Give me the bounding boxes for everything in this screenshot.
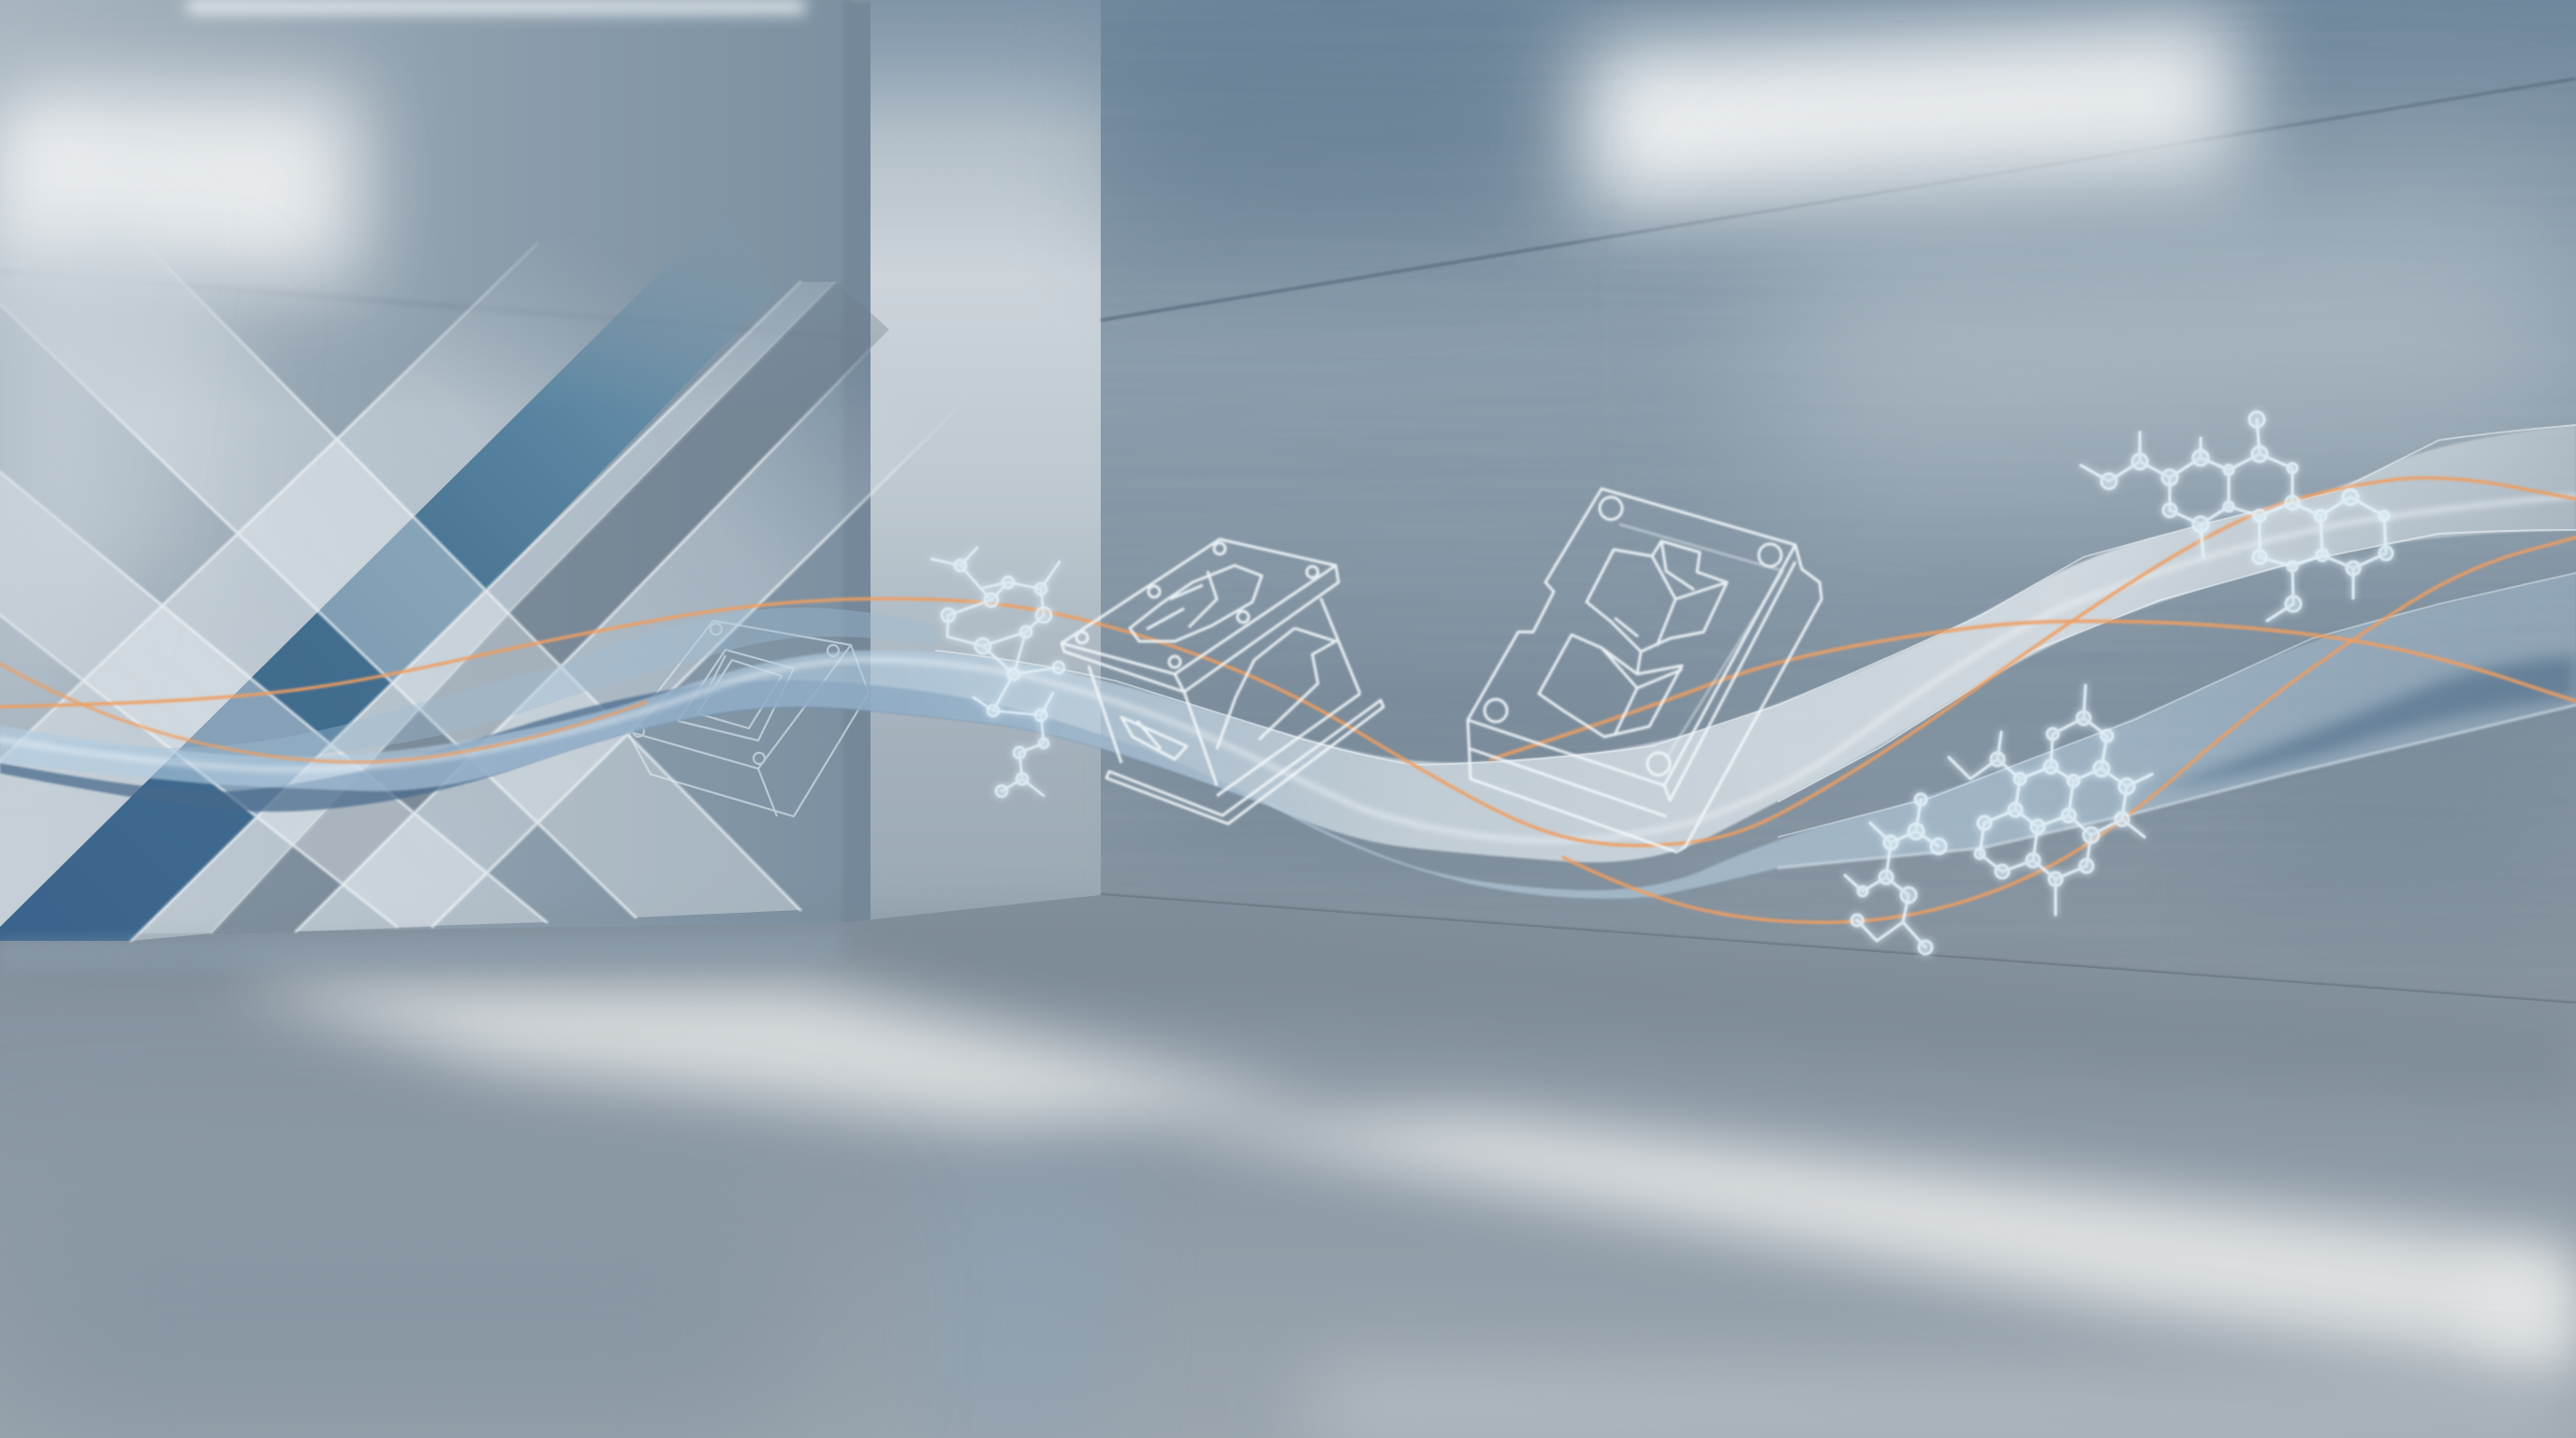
gray band (212, 282, 889, 933)
wireframe mold: right (1468, 489, 1822, 852)
band edge lines (0, 211, 969, 941)
ribbon: dark underside (0, 680, 1294, 816)
falling band one (9, 286, 800, 917)
molecule: bottom right (1845, 685, 2152, 954)
bottom plate (1106, 700, 1383, 824)
molecule: top right (2081, 412, 2393, 621)
soft blur over left edge of bands (0, 225, 159, 749)
cavity (1130, 565, 1262, 641)
falling band two (0, 472, 547, 927)
rising white strip (131, 282, 836, 941)
dark blue band (0, 281, 734, 941)
plate outline (1468, 489, 1795, 785)
central pillar (842, 0, 1101, 936)
ambient lighting on walls (0, 0, 2576, 936)
rising light band one (0, 285, 607, 927)
wireframe mold: center (1061, 539, 1383, 824)
upper cavity (1587, 541, 1727, 652)
ribbon: dark streak right (2153, 655, 2576, 791)
panel: diagonal glass bands (0, 242, 934, 944)
top plate (1061, 539, 1336, 674)
right wall (1101, 0, 2576, 1011)
lower cavity (1539, 635, 1682, 737)
ribbon: main flowing (0, 425, 2576, 862)
ribbon highlights (0, 425, 2576, 868)
ribbon: upper thin left (56, 608, 936, 760)
rising light band two (296, 392, 871, 932)
wireframe mold: left (627, 621, 869, 816)
floor reflection of bands (0, 927, 842, 974)
orange light lines (0, 478, 2576, 922)
molecule: center left (931, 548, 1064, 797)
ribbon: lower right blue (1254, 573, 2576, 899)
floor (0, 895, 2576, 1438)
body (1089, 598, 1360, 785)
left wall (0, 0, 852, 946)
floor light stripes (0, 913, 2576, 1438)
